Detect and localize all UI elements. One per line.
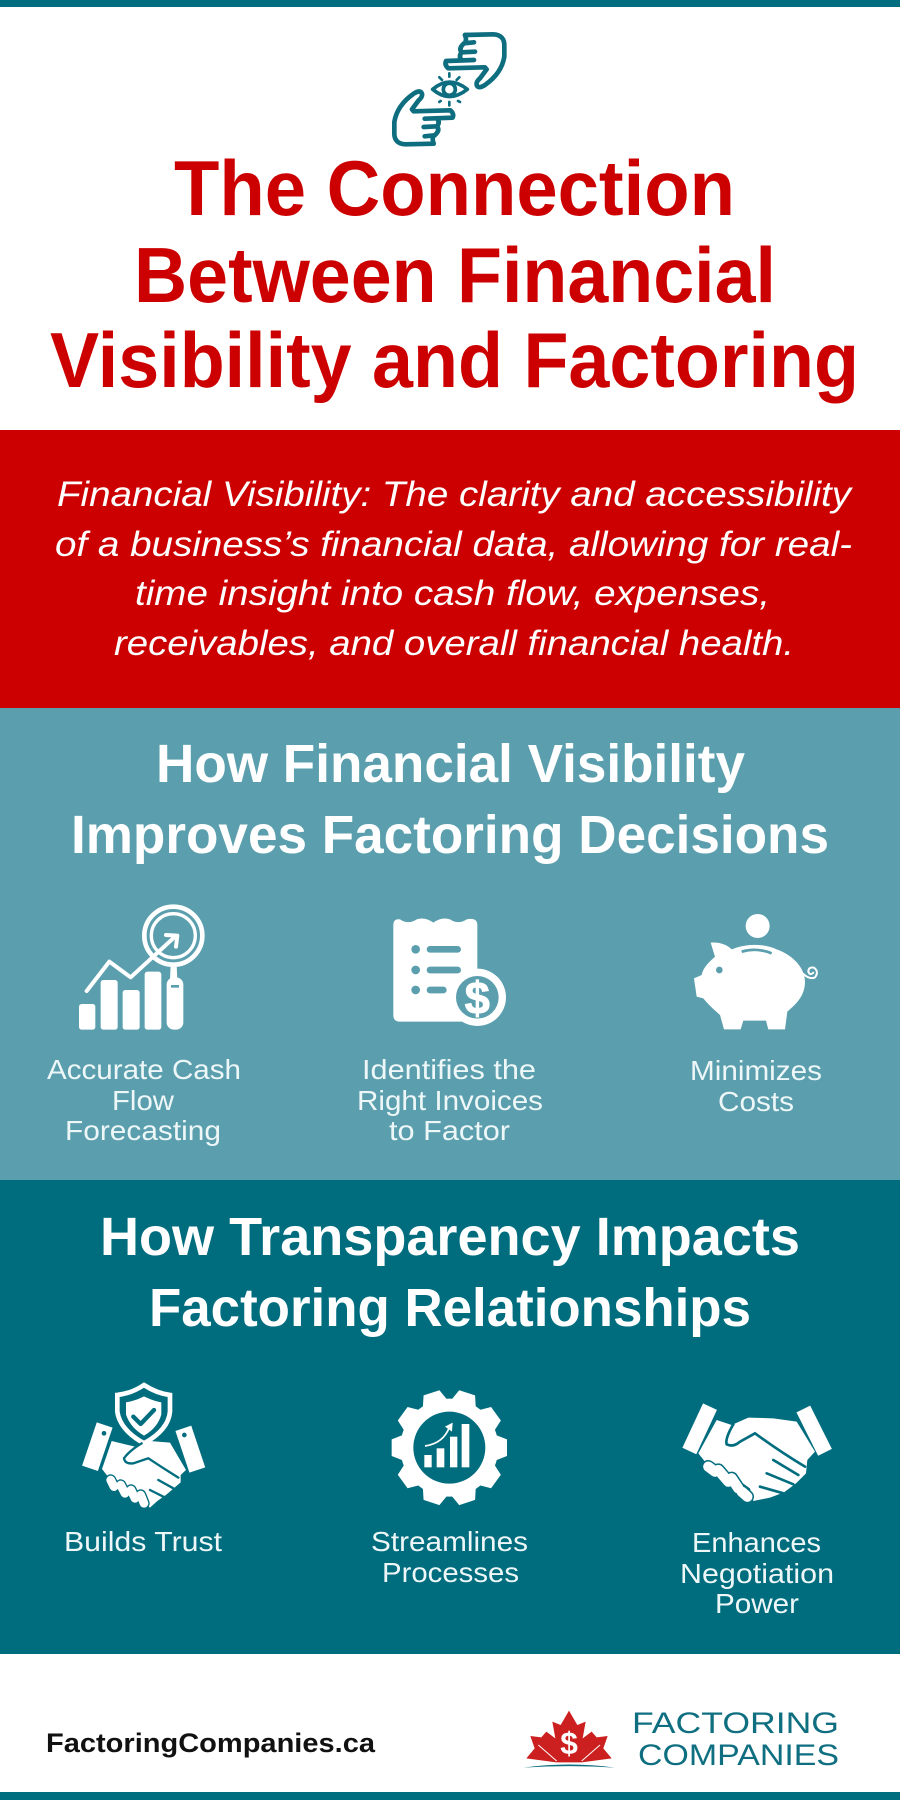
bottom bar — [0, 1792, 900, 1800]
icon: piggy bank — [694, 914, 817, 1029]
title — [50, 144, 859, 404]
logo wordmark — [632, 1707, 839, 1772]
definition text: receivables, and overall financial health. — [114, 624, 794, 663]
title: Between Financial — [134, 231, 776, 319]
label: Streamlines — [371, 1526, 528, 1557]
footer website: FactoringCompanies.ca — [46, 1728, 376, 1758]
heading: How Transparency Impacts — [100, 1207, 800, 1267]
title: Visibility and Factoring — [50, 316, 859, 404]
logo wordmark: COMPANIES — [638, 1739, 839, 1772]
label: Identifies the — [362, 1054, 536, 1085]
definition text: Financial Visibility: The clarity and accessibility — [57, 475, 854, 514]
label: Processes — [382, 1557, 519, 1588]
label: Accurate Cash — [47, 1054, 241, 1085]
icon: maple leaf: $ — [560, 1725, 578, 1761]
icon: maple leaf — [523, 1711, 615, 1768]
panel: definition — [0, 430, 900, 708]
logo wordmark: FACTORING — [632, 1707, 839, 1740]
definition text: time insight into cash flow, expenses, — [135, 574, 770, 613]
label — [371, 1526, 528, 1588]
label — [47, 1054, 241, 1146]
label: Power — [715, 1588, 799, 1619]
top bar — [0, 0, 900, 7]
heading: Improves Factoring Decisions — [71, 805, 829, 865]
heading: How Financial Visibility — [156, 734, 745, 794]
label: Flow — [112, 1085, 175, 1116]
label — [357, 1054, 543, 1146]
definition text — [55, 475, 854, 663]
panel: transparency — [0, 1180, 900, 1654]
icon: receipt with dollar — [393, 919, 506, 1026]
label: Costs — [718, 1086, 794, 1117]
icon: hands framing an eye — [394, 34, 504, 144]
logo — [523, 1707, 839, 1772]
icon: gear with chart — [392, 1388, 507, 1507]
label: Right Invoices — [357, 1085, 543, 1116]
label — [690, 1055, 822, 1117]
label: Minimizes — [690, 1055, 822, 1086]
icon: receipt with dollar: $ — [465, 972, 490, 1023]
label: Negotiation — [680, 1558, 834, 1589]
icon: chart with magnifier — [79, 907, 202, 1030]
label — [680, 1527, 834, 1619]
icon: shield and handshake — [90, 1385, 197, 1508]
label: Builds Trust — [64, 1526, 222, 1557]
heading — [71, 734, 829, 865]
icon: handshake — [689, 1407, 825, 1501]
label: Forecasting — [65, 1115, 221, 1146]
label: Enhances — [692, 1527, 821, 1558]
panel: financial visibility — [0, 708, 900, 1180]
header panel — [50, 34, 859, 404]
title: The Connection — [174, 144, 735, 232]
heading: Factoring Relationships — [149, 1278, 751, 1338]
definition text: of a business’s financial data, allowing for real- — [55, 525, 852, 564]
heading — [100, 1207, 800, 1338]
label: to Factor — [389, 1115, 510, 1146]
